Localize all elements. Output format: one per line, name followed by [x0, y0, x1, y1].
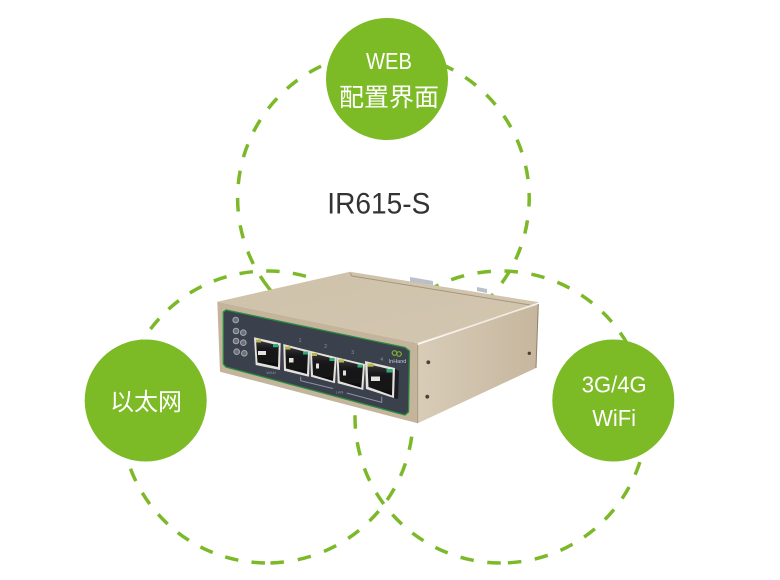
- node: WEB configuration interface: [326, 18, 448, 140]
- node: 3G/4G WiFi: WiFi: [592, 405, 636, 431]
- port: LAN 3: [337, 357, 365, 390]
- device front face: [217, 302, 418, 423]
- port numbers: [266, 338, 383, 394]
- logo: InHand: [389, 359, 406, 365]
- device top face: [217, 272, 539, 343]
- node: 3G/4G WiFi: 3G/4G: [582, 372, 647, 398]
- port numbers: 4: [380, 357, 383, 363]
- screws: [425, 352, 531, 399]
- dashed circle: 3G/4G WiFi: [355, 271, 647, 563]
- front control panel: [223, 310, 410, 415]
- node: 3G/4G WiFi: [552, 340, 674, 462]
- port numbers: LAN: [336, 390, 344, 394]
- port: LAN 1: [283, 344, 310, 377]
- device right face: [418, 304, 538, 423]
- node: Ethernet: 以太网: [110, 389, 182, 416]
- device: router: [217, 272, 539, 423]
- LAN bracket: [301, 377, 382, 402]
- title: model name: IR615-S: [327, 187, 430, 220]
- logo: [389, 351, 406, 365]
- rear mounting clips: [410, 277, 487, 293]
- node: Ethernet: [85, 340, 207, 462]
- port: WAN: [254, 337, 281, 370]
- port: LAN 2: [310, 351, 337, 383]
- port: LAN 4: [365, 361, 399, 399]
- dashed circle: WEB: [179, 0, 588, 402]
- status LEDs: [233, 317, 247, 356]
- port numbers: 2: [324, 344, 327, 350]
- node: WEB configuration interface: 配置界面: [339, 84, 439, 112]
- port numbers: 1: [299, 338, 302, 344]
- port numbers: 3: [351, 350, 354, 356]
- dashed circle: Ethernet: [119, 269, 415, 565]
- node: WEB configuration interface: WEB: [366, 48, 412, 74]
- port numbers: WAN: [266, 370, 276, 375]
